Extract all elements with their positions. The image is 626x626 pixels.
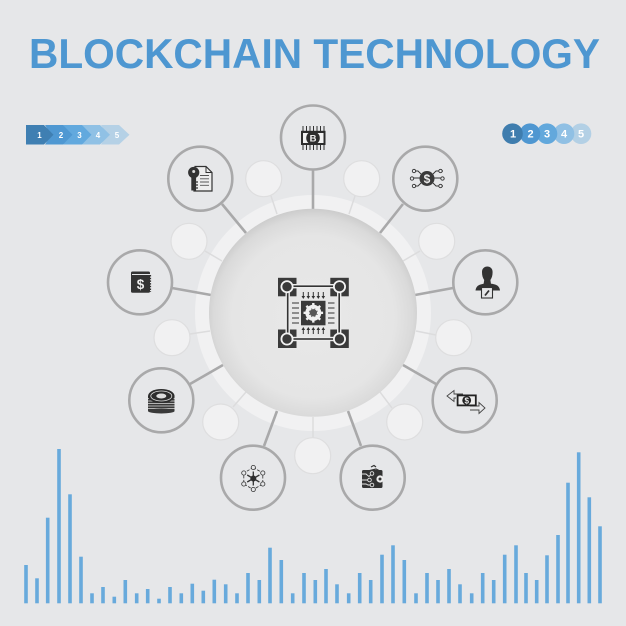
icon: money exchange: $ (464, 396, 469, 405)
arrow step indicator 1 to 5: 1 (37, 131, 42, 140)
icon: bitcoin coin stack (148, 389, 175, 414)
title: BLOCKCHAIN TECHNOLOGY (29, 30, 600, 77)
icon: key and document (188, 166, 212, 191)
icon: money exchange (447, 390, 485, 414)
circle step indicator 1 to 5: 5 (578, 129, 584, 141)
arrow step indicator 1 to 5: 3 (77, 131, 82, 140)
circle step indicator 1 to 5: 4 (561, 129, 568, 141)
icon: dollar circuit node: $ (424, 172, 431, 186)
arrow step indicator 1 to 5: 4 (96, 131, 101, 140)
icon: crypto wallet (362, 466, 384, 488)
arrow step indicator 1 to 5: 2 (59, 131, 64, 140)
icon: dollar ledger (131, 272, 150, 293)
bottom bar chart (24, 449, 602, 603)
arrow step indicator 1 to 5: 5 (115, 131, 120, 140)
thin connectors to small circles (190, 196, 436, 438)
icon: person with badge (476, 266, 500, 298)
icon: central chip with gear (278, 278, 349, 348)
central hub circle (209, 209, 417, 417)
icon: dollar circuit node (410, 169, 444, 188)
arrow step indicator 1 to 5 (26, 125, 130, 144)
circle step indicator 1 to 5 (502, 123, 591, 144)
icon: bitcoin chip (301, 126, 326, 150)
circle step indicator 1 to 5: 3 (544, 129, 550, 141)
circle step indicator 1 to 5: 1 (510, 129, 516, 141)
icon: dollar ledger: $ (137, 277, 145, 292)
thick connectors to icon circles (172, 170, 453, 446)
small empty circles (154, 161, 472, 474)
icon: hexagon network (242, 465, 265, 492)
circle step indicator 1 to 5: 2 (527, 129, 534, 141)
icon circles outlines (108, 106, 517, 510)
outer pale ring (195, 195, 431, 431)
icon: bitcoin chip: B (310, 134, 317, 144)
